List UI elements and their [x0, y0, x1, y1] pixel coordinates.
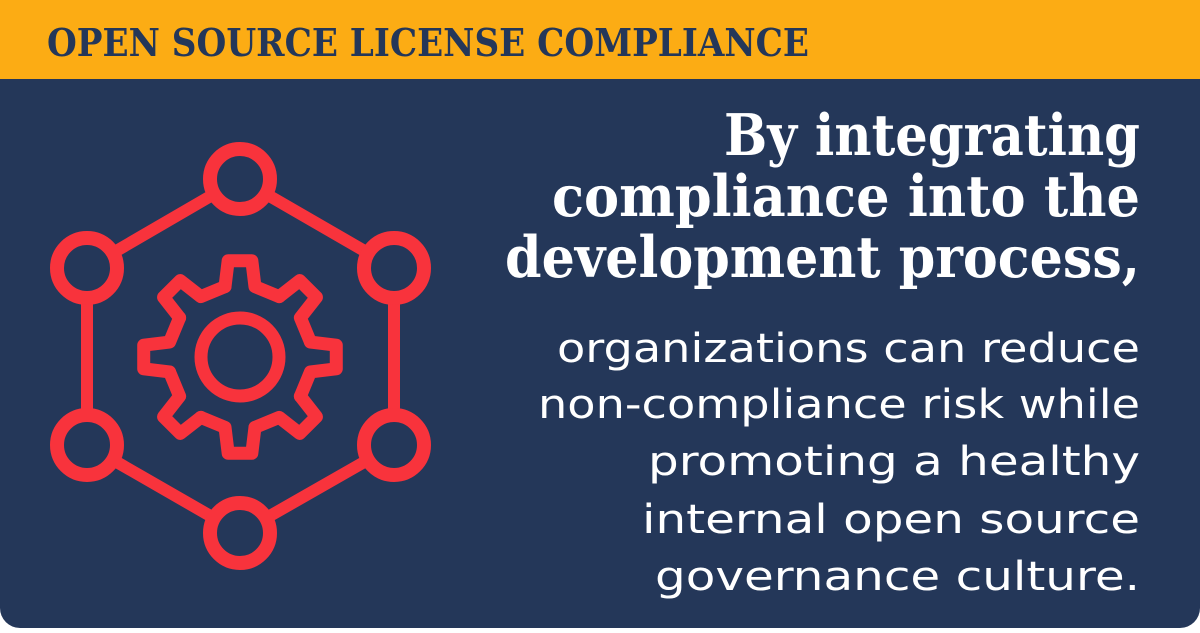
body text: organizations can reduce [557, 326, 1140, 372]
body text: promoting a healthy [648, 439, 1140, 485]
headline: bold slab text [505, 102, 1140, 291]
body text: non-compliance risk while [538, 382, 1140, 428]
banner title: OPEN SOURCE LICENSE COMPLIANCE [47, 20, 809, 65]
headline: bold slab text: By integrating [724, 102, 1140, 169]
headline: bold slab text: compliance into the [552, 163, 1140, 230]
body text [538, 326, 1140, 600]
body text: internal open source [642, 497, 1140, 543]
banner: orange header [0, 0, 1200, 79]
headline: bold slab text: development process, [505, 224, 1140, 291]
body text: governance culture. [655, 554, 1140, 600]
icon: network hexagon with gear [57, 149, 424, 563]
